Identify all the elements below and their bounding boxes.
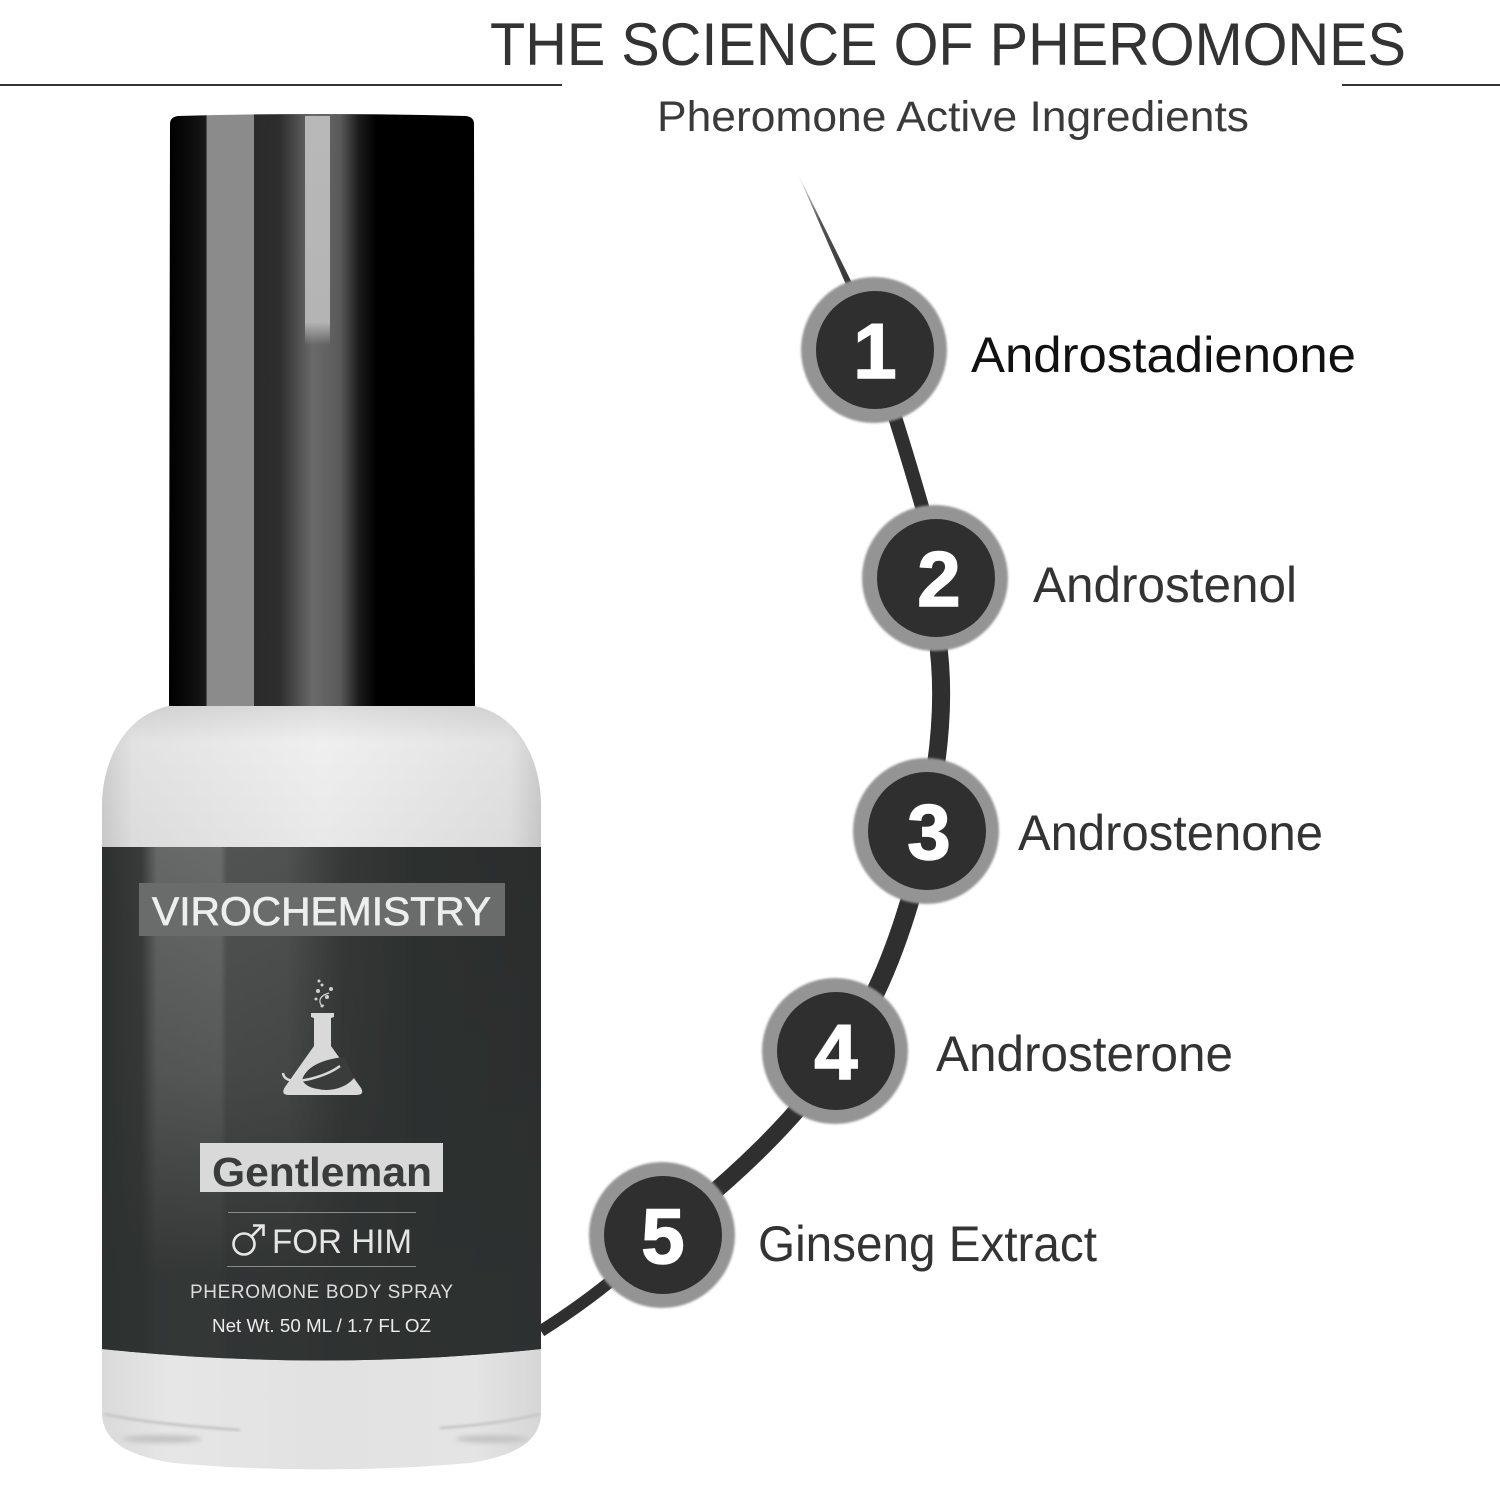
step 5: Ginseng Extract: 5: [641, 1192, 685, 1280]
brand band: VIROCHEMISTRY: [152, 890, 491, 934]
icon: flask with leaf: [283, 980, 362, 1095]
step 3: Androstenone: 3: [907, 788, 951, 876]
step 3: Androstenone: Androstenone: [1018, 805, 1323, 861]
icon: male symbol: [234, 1225, 264, 1254]
step 1: Androstadienone: Androstadienone: [971, 327, 1356, 383]
product type: PHEROMONE BODY SPRAY: [190, 1282, 453, 1303]
step 2: Androstenol: [862, 505, 1297, 651]
bottle label: [102, 847, 541, 1360]
curved connector line: [541, 172, 941, 1331]
step 2: Androstenol: Androstenol: [1033, 557, 1297, 613]
bottle cap: [169, 114, 475, 706]
step 4: Androsterone: [762, 978, 1233, 1124]
bottle base: [102, 1340, 541, 1470]
step 3: Androstenone: [853, 758, 1323, 904]
step 1: Androstadienone: [801, 277, 1356, 423]
step 4: Androsterone: Androsterone: [936, 1026, 1233, 1082]
step 4: Androsterone: 4: [814, 1008, 858, 1096]
bottle shoulder: [102, 706, 541, 850]
for him text: FOR HIM: [272, 1223, 412, 1261]
heading rule left: [0, 84, 562, 86]
step 5: Ginseng Extract: Ginseng Extract: [758, 1216, 1097, 1272]
heading rule right: [1342, 84, 1500, 86]
product name band: Gentleman: [212, 1149, 432, 1195]
step 5: Ginseng Extract: [589, 1162, 1097, 1308]
step 1: Androstadienone: 1: [853, 307, 897, 395]
step 2: Androstenol: 2: [917, 535, 961, 623]
title: THE SCIENCE OF PHEROMONES: [490, 11, 1406, 78]
subtitle: Pheromone Active Ingredients: [657, 93, 1249, 141]
product bottle: [102, 114, 541, 1470]
net weight: Net Wt. 50 ML / 1.7 FL OZ: [212, 1316, 431, 1336]
